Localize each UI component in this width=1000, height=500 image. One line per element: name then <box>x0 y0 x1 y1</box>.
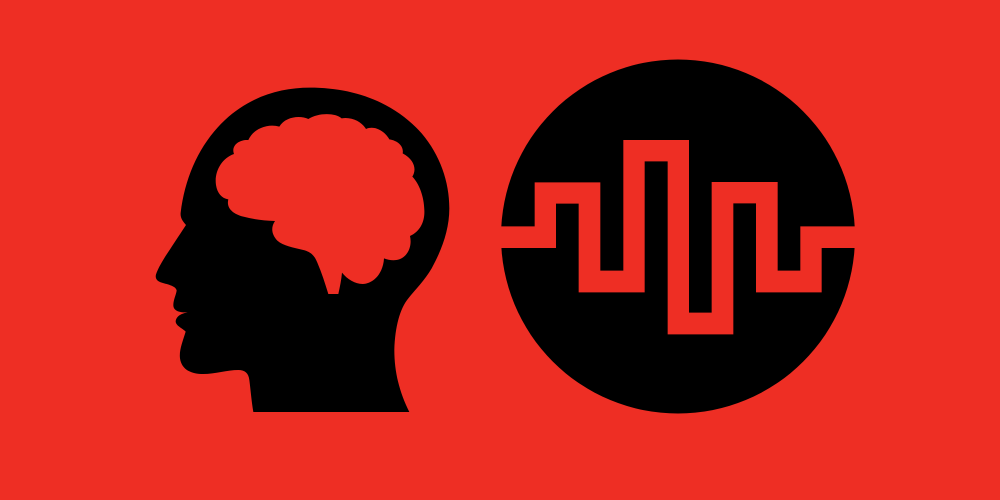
black circle <box>501 60 855 414</box>
icon: head with brain <box>156 88 449 412</box>
brain <box>216 114 424 294</box>
square wave signal line <box>490 140 870 334</box>
icon: circle with square wave <box>490 60 870 414</box>
head silhouette <box>156 88 449 412</box>
